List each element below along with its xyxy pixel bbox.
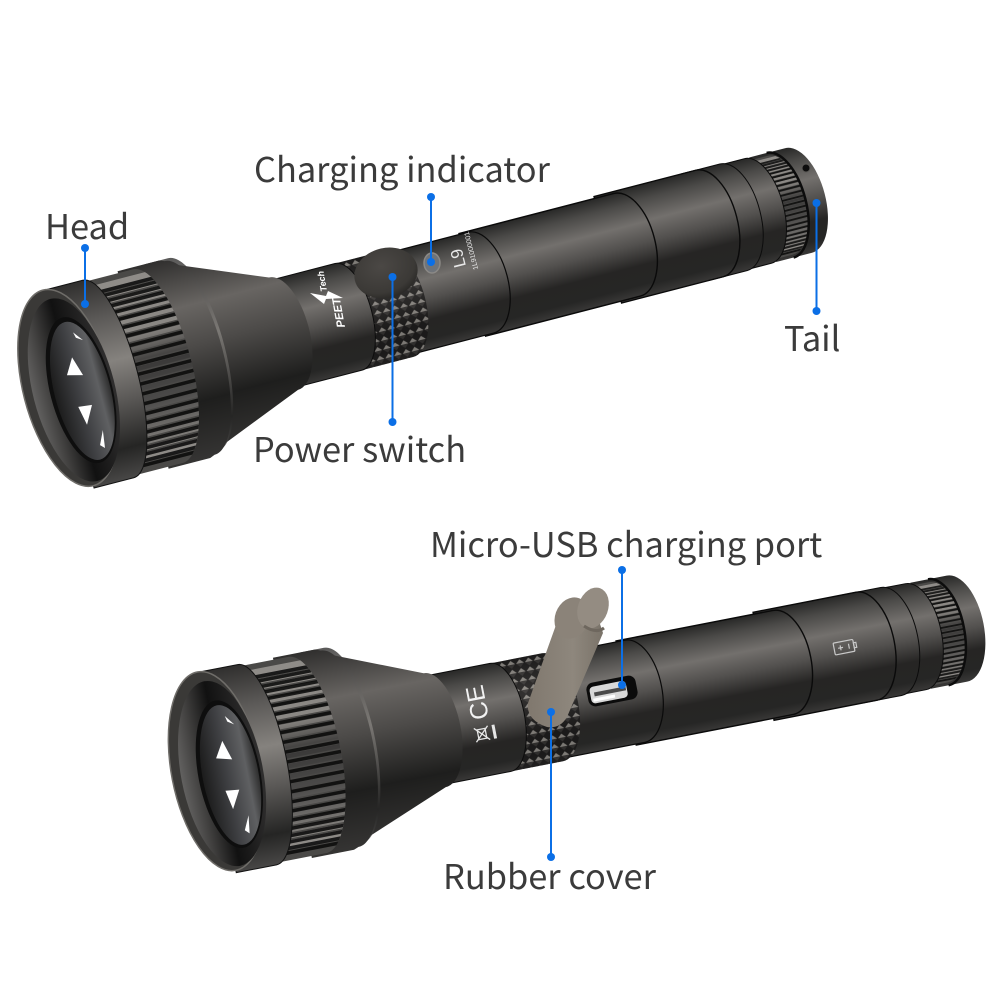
- disposal icon: [474, 724, 497, 742]
- model text L9: 1L91000001: [464, 231, 480, 270]
- power switch button: [349, 241, 423, 305]
- label: Micro-USB charging port: [430, 517, 822, 689]
- CE mark: CE: [461, 683, 495, 722]
- label: Rubber cover: Rubber cover: [443, 849, 657, 899]
- rubber cover: [528, 583, 614, 727]
- label: Tail: [784, 199, 840, 361]
- label: Head: Head: [45, 199, 129, 249]
- label: Charging indicator: [254, 142, 551, 266]
- label: Tail: Tail: [784, 311, 840, 361]
- battery icon: [833, 639, 857, 655]
- label: Head: [45, 199, 129, 308]
- tail hole: [802, 164, 810, 172]
- label: Charging indicator: Charging indicator: [254, 142, 551, 192]
- label: Rubber cover: [443, 708, 657, 899]
- bottom flashlight: [153, 523, 1000, 881]
- label: Micro-USB charging port: Micro-USB charging port: [430, 517, 822, 567]
- model text L9: [443, 231, 480, 275]
- label: Power switch: Power switch: [253, 422, 466, 472]
- logo: [310, 270, 348, 329]
- top flashlight: [0, 95, 850, 499]
- label: Power switch: [253, 273, 466, 472]
- charging indicator light: [424, 253, 440, 273]
- logo: Tech: [315, 270, 329, 292]
- logo: PEET: [331, 296, 348, 329]
- micro-USB charging port: [585, 674, 639, 708]
- model text L9: L9: [447, 247, 470, 270]
